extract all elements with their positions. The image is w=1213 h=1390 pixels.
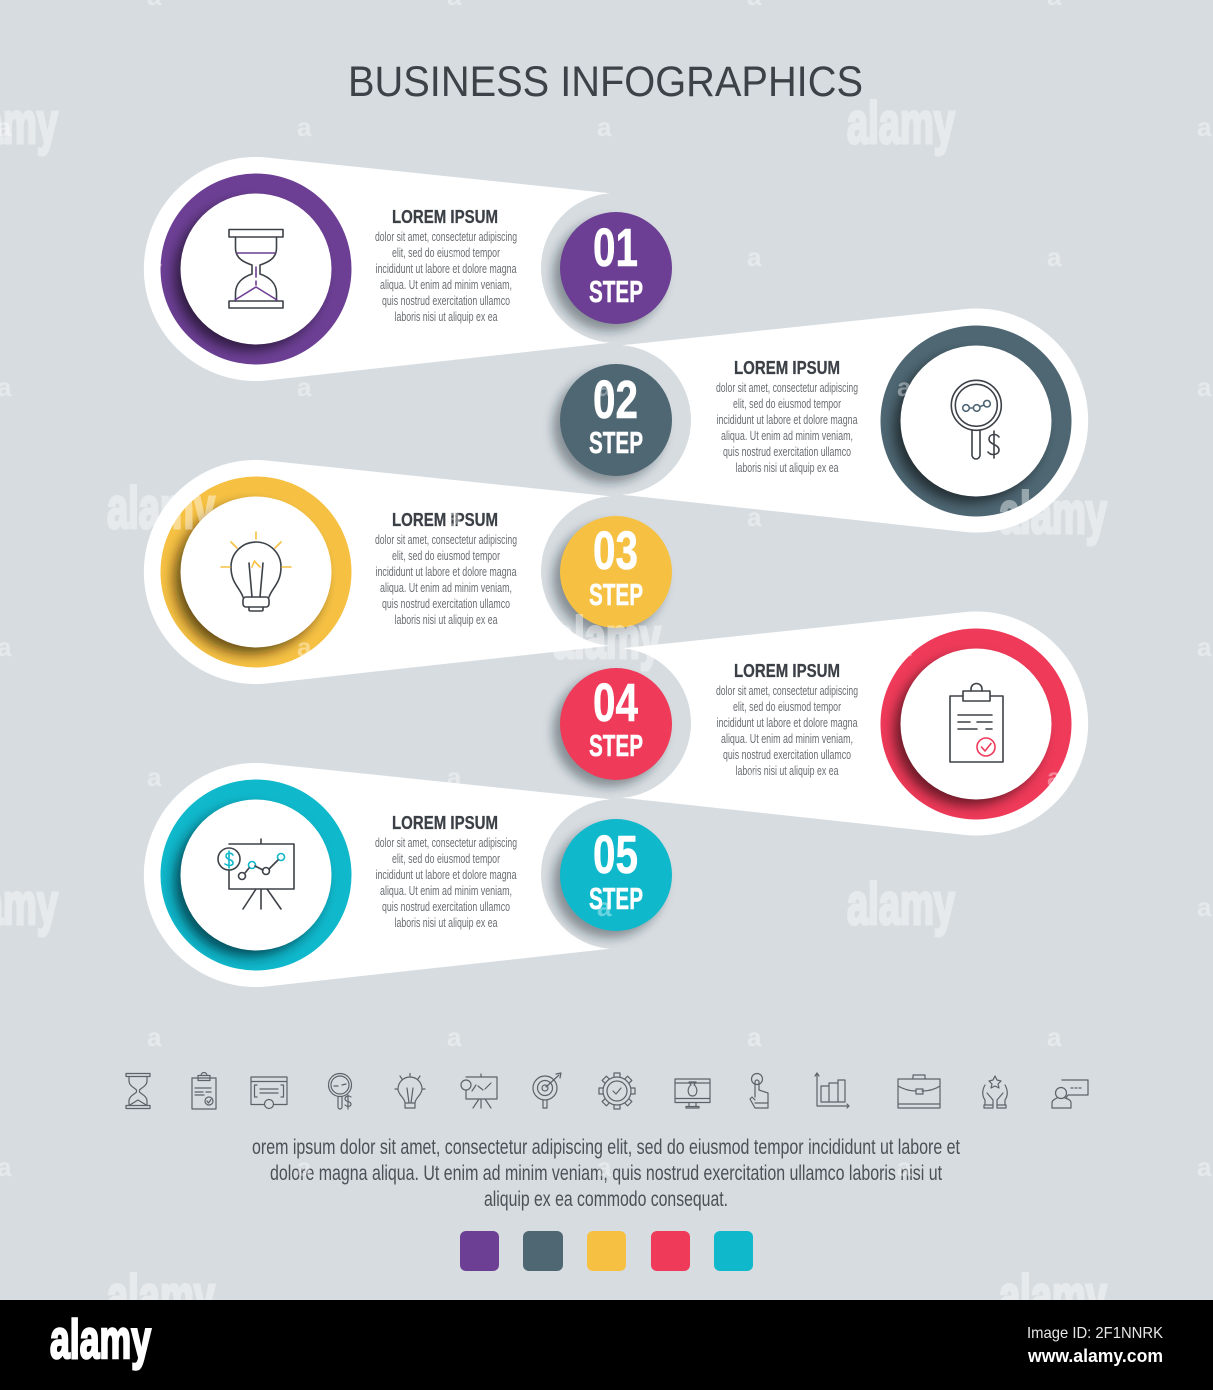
watermarks: alamy — [553, 606, 661, 671]
watermarks: a — [447, 502, 462, 532]
text block: dolor sit amet, consectetur adipiscing — [375, 533, 517, 547]
text block: quis nostrud exercitation ullamco — [723, 445, 851, 459]
watermarks: alamy — [107, 476, 215, 541]
watermarks: a — [297, 632, 312, 662]
icon: board small — [461, 1074, 497, 1108]
text block: dolor sit amet, consectetur adipiscing — [716, 684, 858, 698]
step badge 05: STEP — [589, 881, 643, 916]
watermarks: a — [1197, 892, 1212, 922]
text block: dolor sit amet, consectetur adipiscing — [375, 230, 517, 244]
icon: magnifier with dollar — [951, 380, 1001, 459]
icon: hourglass small — [126, 1074, 150, 1108]
watermarks: a — [747, 1022, 762, 1052]
step badge 01: 01 — [593, 218, 638, 278]
text block: laboris nisi ut aliquip ex ea — [394, 613, 498, 627]
icon: bar chart small — [815, 1073, 849, 1108]
icon: target small — [533, 1073, 561, 1108]
step badge 03 — [553, 516, 672, 635]
watermarks: a — [1197, 632, 1212, 662]
text block: aliqua. Ut enim ad minim veniam, — [721, 732, 853, 746]
text block: quis nostrud exercitation ullamco — [723, 748, 851, 762]
text block: elit, sed do eiusmod tempor — [392, 549, 500, 563]
step badge 04: STEP — [589, 728, 643, 763]
icon: light bulb — [221, 532, 291, 611]
text block: aliqua. Ut enim ad minim veniam, — [380, 884, 512, 898]
watermarks: a — [1197, 112, 1212, 142]
heading: LOREM IPSUM — [392, 510, 498, 530]
text block: quis nostrud exercitation ullamco — [382, 900, 510, 914]
watermarks: a — [297, 112, 312, 142]
step badge 01: STEP — [589, 274, 643, 309]
watermarks: a — [1047, 762, 1062, 792]
watermarks: a — [897, 1152, 912, 1182]
text block: aliqua. Ut enim ad minim veniam, — [721, 429, 853, 443]
watermarks: a — [747, 242, 762, 272]
watermarks: a — [1197, 372, 1212, 402]
text block: laboris nisi ut aliquip ex ea — [394, 916, 498, 930]
text block: aliqua. Ut enim ad minim veniam, — [380, 278, 512, 292]
icon: bulb small — [395, 1074, 425, 1108]
watermarks: a — [747, 762, 762, 792]
colour swatches — [460, 1231, 753, 1271]
text block: incididunt ut labore et dolore magna — [716, 716, 858, 730]
heading: LOREM IPSUM — [734, 661, 840, 681]
text block: quis nostrud exercitation ullamco — [382, 597, 510, 611]
watermarks: alamy — [847, 91, 955, 156]
step badge 02: STEP — [589, 425, 643, 460]
watermarks: a — [147, 242, 162, 272]
watermarks: a — [147, 762, 162, 792]
text block: elit, sed do eiusmod tempor — [733, 397, 841, 411]
icon: clipboard small — [192, 1072, 216, 1109]
icon: magnifier small — [328, 1074, 352, 1109]
panel: step 04 — [553, 611, 1088, 836]
step badge 03: 03 — [593, 521, 638, 581]
watermarks: a — [297, 372, 312, 402]
watermarks: a — [897, 372, 912, 402]
heading: LOREM IPSUM — [392, 813, 498, 833]
icon: monitor small — [675, 1079, 710, 1108]
step badge 05: 05 — [593, 825, 638, 885]
panel: step 02 — [553, 308, 1088, 532]
bottom paragraph: aliquip ex ea commodo consequat. — [484, 1188, 728, 1211]
text block — [716, 381, 858, 475]
watermarks: a — [447, 242, 462, 272]
panel: step 05 — [144, 763, 672, 987]
step badge 02: 02 — [593, 370, 638, 430]
icon: clipboard — [950, 684, 1003, 762]
step badge 04 — [553, 668, 672, 787]
step badge 05 — [553, 819, 672, 938]
text block: incididunt ut labore et dolore magna — [376, 868, 517, 882]
text block: incididunt ut labore et dolore magna — [376, 565, 517, 579]
text block: quis nostrud exercitation ullamco — [382, 294, 510, 308]
text block: incididunt ut labore et dolore magna — [376, 262, 517, 276]
text block: incididunt ut labore et dolore magna — [716, 413, 858, 427]
website: www.alamy.com — [1027, 1346, 1163, 1366]
watermarks: a — [1047, 1022, 1062, 1052]
text block — [716, 684, 858, 778]
watermarks: a — [1047, 242, 1062, 272]
watermarks: alamy — [999, 1264, 1107, 1329]
watermarks: a — [597, 112, 612, 142]
watermarks: alamy — [847, 872, 955, 937]
bottom paragraph: dolore magna aliqua. Ut enim ad minim veniam, quis nostrud exercitation ullamco laboris nisi ut — [270, 1162, 942, 1185]
watermarks: a — [597, 1152, 612, 1182]
icon: certificate window small — [251, 1077, 287, 1108]
text block: aliqua. Ut enim ad minim veniam, — [380, 581, 512, 595]
watermarks: a — [597, 372, 612, 402]
text block — [375, 836, 517, 930]
watermarks: a — [897, 632, 912, 662]
alamy logo: alamy — [50, 1308, 151, 1370]
watermarks: a — [1197, 1152, 1212, 1182]
heading: LOREM IPSUM — [392, 207, 498, 227]
heading: LOREM IPSUM — [734, 358, 840, 378]
watermarks: a — [147, 1022, 162, 1052]
bottom paragraph: orem ipsum dolor sit amet, consectetur adipiscing elit, sed do eiusmod tempor incididunt ut labore et — [252, 1136, 960, 1159]
step badge 03: STEP — [589, 577, 643, 612]
text block — [375, 533, 517, 627]
text block: laboris nisi ut aliquip ex ea — [736, 461, 839, 475]
text block: dolor sit amet, consectetur adipiscing — [716, 381, 858, 395]
watermarks: a — [747, 502, 762, 532]
step badge 01 — [553, 212, 672, 331]
watermarks: a — [597, 892, 612, 922]
icon: person with speech bubble small — [1052, 1080, 1088, 1108]
text block: laboris nisi ut aliquip ex ea — [736, 764, 839, 778]
watermarks: a — [447, 1022, 462, 1052]
text block — [375, 230, 517, 324]
panel: step 03 — [144, 460, 672, 684]
text block: dolor sit amet, consectetur adipiscing — [375, 836, 517, 850]
bottom paragraph — [252, 1136, 960, 1211]
watermarks: a — [297, 892, 312, 922]
icon: gear small — [599, 1073, 635, 1109]
text block: elit, sed do eiusmod tempor — [392, 246, 500, 260]
icon: presentation board — [218, 839, 294, 909]
title: BUSINESS INFOGRAPHICS — [348, 58, 863, 106]
watermarks: a — [297, 1152, 312, 1182]
text block: elit, sed do eiusmod tempor — [733, 700, 841, 714]
icon: briefcase small — [898, 1075, 940, 1108]
watermarks: a — [447, 762, 462, 792]
watermarks: alamy — [107, 1264, 215, 1329]
icon: pointing hand small — [750, 1074, 768, 1108]
step badge 02 — [553, 364, 672, 483]
icon: hands with star small — [983, 1076, 1007, 1108]
panel: step 01 — [144, 157, 672, 381]
text block: elit, sed do eiusmod tempor — [392, 852, 500, 866]
text block: laboris nisi ut aliquip ex ea — [394, 310, 498, 324]
footer bar — [0, 1300, 1213, 1390]
icon: hourglass — [229, 230, 283, 308]
step badge 04: 04 — [593, 673, 638, 733]
image id: Image ID: 2F1NNRK — [1027, 1325, 1163, 1342]
icon row — [126, 1072, 1088, 1109]
watermarks: alamy — [999, 481, 1107, 546]
